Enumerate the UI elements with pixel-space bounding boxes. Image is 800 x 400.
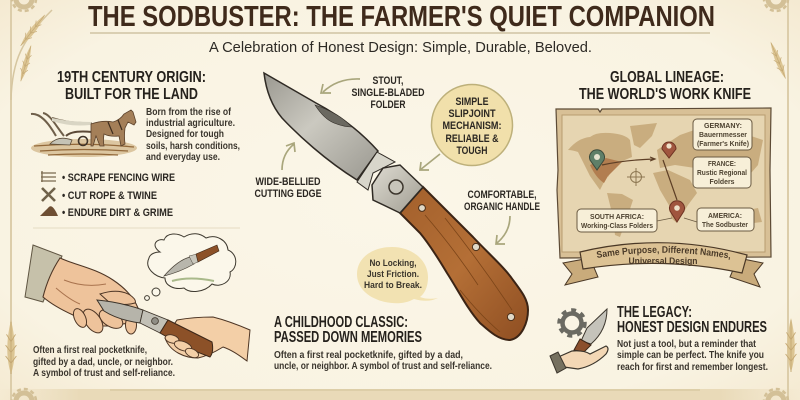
childhood caption left: A symbol of trust and self-reliance.: [33, 368, 175, 379]
pin: america: [590, 150, 604, 170]
childhood body: Often a first real pocketknife, gifted by a dad,: [274, 350, 463, 361]
label: france: [693, 157, 751, 188]
thought bubble: [148, 234, 236, 291]
pin: germany: [662, 142, 676, 158]
callout: friction speech bubble: No Locking,: [370, 258, 416, 269]
arrow: [420, 154, 440, 170]
callout: friction speech bubble: Hard to Break.: [364, 280, 422, 291]
thumb: [100, 291, 135, 304]
arrow: [282, 143, 295, 170]
childhood caption left: Often a first real pocketknife,: [33, 345, 147, 356]
panel: the legacy: simple can be perfect. The knife you: [617, 350, 764, 361]
callout: stout single-bladed: SINGLE-BLADED: [352, 87, 425, 99]
callout: stout single-bladed: FOLDER: [370, 99, 406, 111]
callout: slipjoint mechanism: TOUGH: [456, 145, 488, 157]
origin body text: and everyday use.: [146, 152, 220, 163]
panel: global lineage: [555, 69, 772, 288]
panel: childhood classic: PASSED DOWN MEMORIES: [274, 329, 422, 346]
callout: wide-bellied edge: CUTTING EDGE: [254, 188, 322, 200]
callout: friction speech bubble: [357, 247, 438, 303]
pin: south africa: [670, 201, 684, 222]
knife handle: [400, 187, 528, 340]
label: germany: GERMANY:: [704, 121, 742, 130]
adult hand: [43, 258, 138, 326]
arrow: [496, 216, 510, 244]
handed knife: [97, 300, 213, 357]
callout: comfortable handle: ORGANIC HANDLE: [464, 201, 540, 213]
blade nail nick: [315, 105, 352, 127]
blade tang: [357, 152, 395, 190]
label: germany: (Farmer's Knife): [697, 139, 749, 148]
knife pivot: [389, 180, 403, 194]
panel: origin: BUILT FOR THE LAND: [65, 86, 198, 103]
callout: slipjoint mechanism: SIMPLE: [456, 96, 488, 108]
callout: slipjoint mechanism: MECHANISM:: [442, 120, 502, 132]
callout: wide-bellied edge: [254, 143, 322, 200]
illustration: handing down the knife: [25, 234, 250, 361]
knife blade: [264, 73, 378, 180]
label: america: [697, 208, 754, 231]
panel: the legacy: [550, 304, 768, 373]
illustration: main knife: [264, 73, 528, 340]
callout: stout single-bladed: [321, 75, 425, 111]
childhood caption left: [33, 345, 175, 379]
legacy heading: THE LEGACY:: [617, 304, 692, 321]
adult fingers: [71, 306, 136, 336]
label: france: Rustic Regional: [697, 168, 747, 177]
origin heading: 19TH CENTURY ORIGIN:: [57, 69, 206, 86]
left wheat border: [6, 0, 52, 400]
label: south africa: Working-Class Folders: [581, 221, 653, 230]
arrow: [321, 79, 360, 93]
childhood heading: A CHILDHOOD CLASSIC:: [274, 314, 408, 331]
banner: [562, 242, 764, 288]
callout: stout single-bladed: STOUT,: [372, 75, 404, 87]
label: germany: [693, 119, 752, 150]
knife rivets: [419, 205, 425, 211]
label: america: AMERICA:: [708, 211, 742, 220]
sleeve: [25, 245, 62, 302]
callout: slipjoint mechanism: RELIABLE &: [446, 133, 499, 145]
continents: [568, 123, 763, 237]
callout: slipjoint mechanism: [420, 84, 512, 170]
label: france: Folders: [710, 177, 734, 186]
bullet: endure dirt: • ENDURE DIRT & GRIME: [62, 207, 173, 219]
panel: childhood classic: [274, 314, 492, 372]
thought knife: [164, 245, 219, 281]
origin body text: Designed for tough: [146, 129, 224, 140]
banner: Same Purpose, Different Names,: [596, 246, 730, 260]
label: germany: Bauernmesser: [699, 130, 747, 139]
banner: Universal Design: [628, 256, 698, 267]
bullet: scrape fencing wire: • SCRAPE FENCING WIRE: [62, 172, 175, 184]
icon: fencing wire: [41, 171, 56, 182]
origin body text: soils, harsh conditions,: [146, 141, 240, 152]
callout: comfortable handle: [464, 189, 540, 244]
subtitle: A Celebration of Honest Design: Simple, Durable, Beloved.: [209, 40, 592, 56]
right wheat border: [767, 0, 796, 400]
child hand: [165, 317, 250, 361]
lineage heading: GLOBAL LINEAGE:: [610, 69, 724, 86]
callout: slipjoint mechanism: SLIPJOINT: [448, 108, 496, 120]
label: france: FRANCE:: [708, 159, 736, 168]
route lines: [602, 157, 677, 200]
panel: origin: [31, 69, 240, 219]
illustration: horse and plough: [31, 110, 137, 157]
panel: childhood classic: uncle, or neighbor. A symbol of trust and self-reliance.: [274, 361, 492, 372]
title rule: [90, 32, 710, 34]
origin body text: [146, 107, 240, 163]
panel: the legacy: reach for first and remember longest.: [617, 362, 768, 373]
bullet: cut rope: • CUT ROPE & TWINE: [62, 190, 157, 202]
icon: dirt pile: [40, 206, 58, 216]
icon: crossed tools: [42, 188, 55, 201]
knife bolster: [372, 165, 423, 213]
callout: friction speech bubble: Just Friction.: [367, 269, 419, 280]
label: south africa: [577, 209, 657, 232]
label: america: The Sodbuster: [702, 220, 748, 229]
childhood caption left: gifted by a dad, uncle, or neighbor.: [33, 357, 173, 368]
compass: [627, 168, 645, 186]
panel: global lineage: THE WORLD'S WORK KNIFE: [579, 86, 751, 103]
callout: comfortable handle: COMFORTABLE,: [468, 189, 536, 201]
legacy body: Not just a tool, but a reminder that: [617, 339, 757, 350]
origin body text: Born from the rise of: [146, 107, 232, 118]
thought bubble dots: [152, 288, 160, 296]
callout: wide-bellied edge: WIDE-BELLIED: [256, 176, 321, 188]
icon: gear, knife and hand: [550, 309, 608, 373]
origin body text: industrial agriculture.: [146, 118, 235, 129]
label: south africa: SOUTH AFRICA:: [590, 212, 644, 221]
child fingers: [164, 333, 200, 360]
map: [556, 108, 771, 258]
